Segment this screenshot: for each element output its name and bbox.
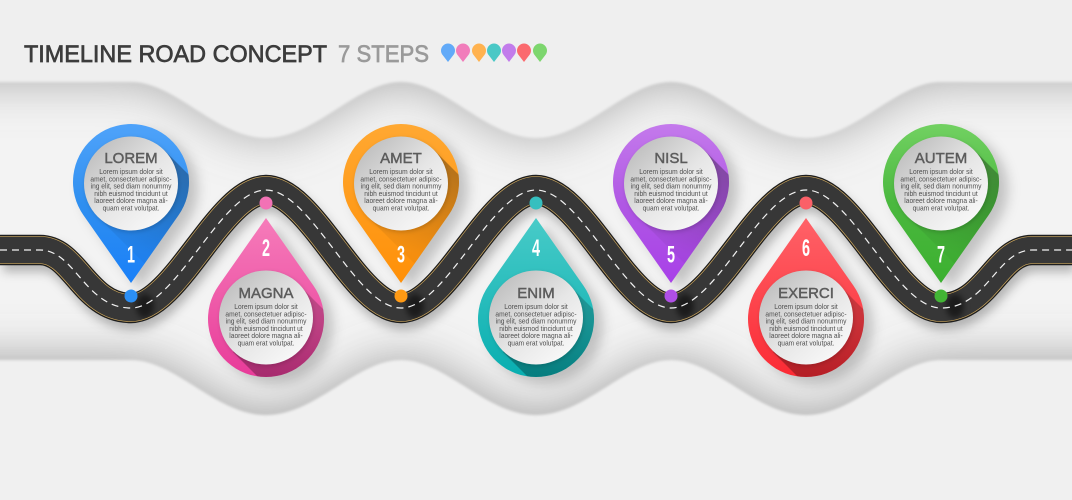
pin body text: laoreet dolore magna ali- <box>229 333 303 340</box>
pin body text: nibh euismod tincidunt ut <box>769 326 843 333</box>
pin 2: MAGNA <box>208 218 338 389</box>
pin body text: amet, consectetuer adipisc- <box>225 311 307 318</box>
pin body text: laoreet dolore magna ali- <box>904 198 978 205</box>
pin body text: ing elit, sed diam nonummy <box>496 318 577 326</box>
pin body text: laoreet dolore magna ali- <box>94 198 168 205</box>
pin body text: laoreet dolore magna ali- <box>769 333 843 340</box>
pin body text: ing elit, sed diam nonummy <box>91 183 172 191</box>
pin body text: amet, consectetuer adipisc- <box>495 311 577 318</box>
pin 1: LOREM <box>73 124 204 290</box>
pin body text: ing elit, sed diam nonummy <box>361 183 442 191</box>
pin number: 2 <box>262 235 270 262</box>
pin body text: ing elit, sed diam nonummy <box>631 183 712 191</box>
pin heading: EXERCI <box>778 285 834 302</box>
pin body text: quam erat volutpat. <box>238 340 294 348</box>
pin number: 3 <box>397 242 405 269</box>
dot 1 <box>124 290 138 302</box>
dot 6 <box>800 196 812 210</box>
pin 6: EXERCI <box>748 218 878 389</box>
pin body text: nibh euismod tincidunt ut <box>364 191 438 198</box>
pin body text: quam erat volutpat. <box>508 340 564 348</box>
pin 7: AUTEM <box>883 124 1014 290</box>
pin body text: quam erat volutpat. <box>103 205 159 213</box>
pin body text: amet, consectetuer adipisc- <box>90 176 172 183</box>
pin body text: laoreet dolore magna ali- <box>634 198 708 205</box>
pin number: 7 <box>937 242 945 269</box>
pin number: 5 <box>667 242 675 269</box>
dot 5 <box>664 290 678 302</box>
pin heading: NISL <box>654 150 688 167</box>
pin heading: AUTEM <box>915 150 967 167</box>
pin body text: ing elit, sed diam nonummy <box>226 318 307 326</box>
pin body text: quam erat volutpat. <box>643 205 699 213</box>
pin body text: quam erat volutpat. <box>778 340 834 348</box>
pin body text: ing elit, sed diam nonummy <box>766 318 847 326</box>
pin heading: MAGNA <box>238 285 294 302</box>
pin body text: quam erat volutpat. <box>913 205 969 213</box>
pin number: 6 <box>802 235 810 262</box>
pin body text: amet, consectetuer adipisc- <box>765 311 847 318</box>
road <box>0 190 1072 318</box>
pin body text: ing elit, sed diam nonummy <box>901 183 982 191</box>
pin body text: amet, consectetuer adipisc- <box>630 176 712 183</box>
pin 4: ENIM <box>478 218 608 389</box>
pin body text: Lorem ipsum dolor sit <box>639 169 703 176</box>
pin body text: Lorem ipsum dolor sit <box>234 304 298 311</box>
subtitle: 7 steps: 7 STEPS <box>338 41 429 68</box>
pin body text: nibh euismod tincidunt ut <box>634 191 708 198</box>
pin body text: nibh euismod tincidunt ut <box>904 191 978 198</box>
pin body text: nibh euismod tincidunt ut <box>94 191 168 198</box>
dot 4 <box>530 196 542 210</box>
pin body text: Lorem ipsum dolor sit <box>99 169 163 176</box>
pin body text: quam erat volutpat. <box>373 205 429 213</box>
pin body text: amet, consectetuer adipisc- <box>360 176 442 183</box>
pin body text: Lorem ipsum dolor sit <box>909 169 973 176</box>
pin body text: nibh euismod tincidunt ut <box>229 326 303 333</box>
dot 3 <box>394 290 408 302</box>
pin number: 1 <box>127 242 135 269</box>
pin heading: AMET <box>380 150 422 167</box>
legend: small coloured pins <box>441 44 547 62</box>
pin body text: amet, consectetuer adipisc- <box>900 176 982 183</box>
pin 3: AMET <box>343 124 474 290</box>
pin body text: Lorem ipsum dolor sit <box>774 304 838 311</box>
title: TIMELINE ROAD CONCEPT <box>24 41 327 68</box>
dot 7 <box>934 290 948 302</box>
dot 2 <box>260 196 272 210</box>
pin 5: NISL <box>613 124 744 290</box>
pin body text: nibh euismod tincidunt ut <box>499 326 573 333</box>
pin body text: Lorem ipsum dolor sit <box>504 304 568 311</box>
pin number: 4 <box>532 235 540 262</box>
pin heading: LOREM <box>104 150 158 167</box>
pin body text: laoreet dolore magna ali- <box>499 333 573 340</box>
pin body text: Lorem ipsum dolor sit <box>369 169 433 176</box>
pin heading: ENIM <box>517 285 555 302</box>
pin body text: laoreet dolore magna ali- <box>364 198 438 205</box>
